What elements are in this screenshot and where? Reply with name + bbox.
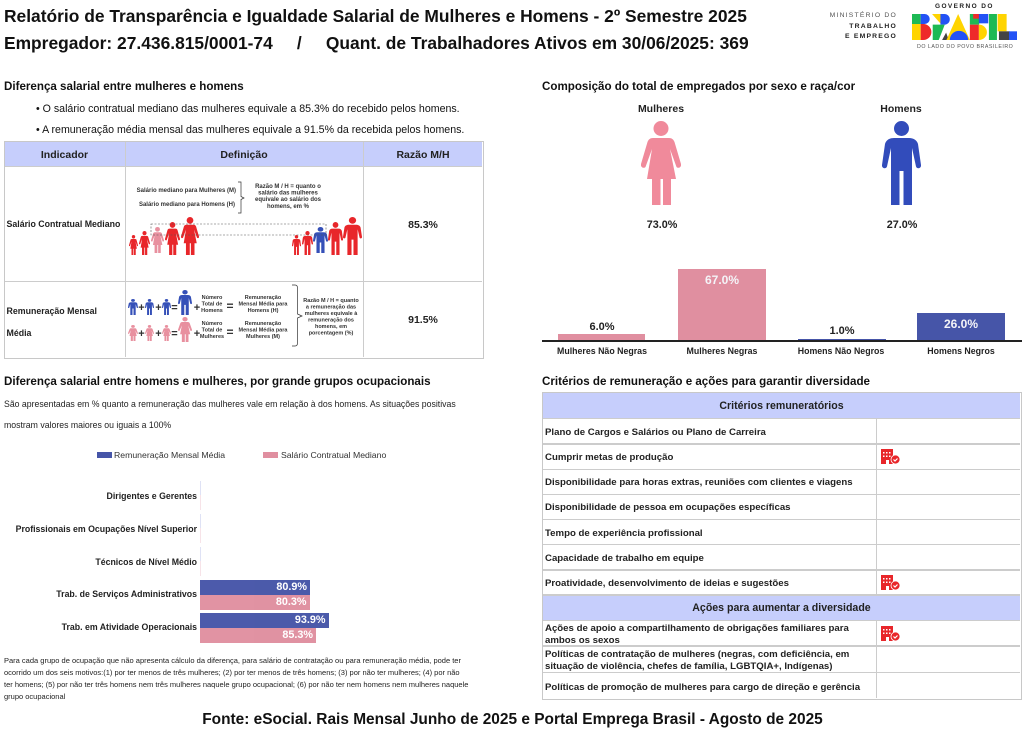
table header [5,142,482,166]
row label: remuneração: Média [6,328,31,338]
diagram: remuneração média: + [155,302,162,314]
bar chart: grupos ocupacionais: Técnicos de Nível Médio [95,557,197,567]
action row: situação de violência, chefes de família, LGBTQIA+, Indígenas) [545,661,832,672]
row label: salário contratual: Salário Contratual Mediano [6,219,120,229]
icon: woman [641,121,681,205]
diagram: remuneração média: Total de [202,328,222,334]
bar chart: composição [542,269,1022,356]
panel: criteria table [542,392,1022,700]
criteria row: Tempo de experiência profissional [545,528,703,538]
header: ações: Ações para aumentar a diversidade [692,602,871,614]
diagram: remuneração média: + [138,328,145,340]
value: 73%: 73.0% [647,219,677,231]
bar: administrativos remuneração: 80.9% [276,580,307,592]
footnote: Para cada grupo de ocupação que não apresenta cálculo da diferença, para salário de contratação ou para remuneração média, pode ter [4,656,461,665]
header: critérios remuneratórios [543,393,1020,418]
criteria row: Disponibilidade para horas extras, reuniões com clientes e viagens [545,476,853,488]
diagram: salário mediano: salário das mulheres [258,190,319,196]
logo: governo do Brasil [912,2,1017,50]
bar: operacionais salário [200,628,316,642]
employer line: Empregador: 27.436.815/0001-74 / Quant. de Trabalhadores Ativos em 30/06/2025: 369 [4,33,749,53]
diagram: salário mediano: Salário mediano para Mulheres (M) [137,188,236,194]
diagram: remuneração média: Total de [202,302,222,308]
diagram: remuneração média: + [194,328,200,340]
intro text: mostram valores maiores ou iguais a 100% [4,420,171,430]
bar chart: grupos ocupacionais: Trab. de Serviços Administrativos [56,589,197,599]
diagram: salário mediano: equivale ao salário dos [255,197,322,203]
bar chart: grupos ocupacionais: Trab. em Atividade Operacionais [62,622,197,632]
criteria row: Disponibilidade de pessoa em ocupações específicas [545,502,791,512]
diagram: remuneração média: Mensal Média para [239,328,288,334]
diagram: remuneração média: Mensal Média para [239,302,288,308]
bar: operacionais remuneração [200,612,328,628]
title: Relatório de Transparência e Igualdade Salarial de Mulheres e Homens - 2º Semestre 2025 [4,6,747,26]
icon: empresa check [881,449,900,464]
diagram: remuneração média [128,284,359,346]
diagram: remuneração média: homens, em [315,324,347,330]
bar chart: grupos ocupacionais: Profissionais em Ocupações Nível Superior [16,524,197,534]
value: 91.5: 91.5% [408,314,438,326]
criteria row: Plano de Cargos e Salários ou Plano de Carreira [545,426,766,438]
diagram: remuneração média: = [171,302,178,314]
diagram: remuneração média: porcentagem (%) [309,330,353,336]
bar chart: grupos ocupacionais [16,481,329,643]
diagram: remuneração média: Mulheres [200,334,224,340]
diagram: remuneração média: Homens [201,308,223,314]
action row: Políticas de promoção de mulheres para cargo de direção e gerência [545,682,860,692]
bar: homens negros: 26.0% [944,317,978,331]
criteria row: Capacidade de trabalho em equipe [545,552,704,564]
bar: administrativos salário: 80.3% [276,596,306,608]
footnote: ter homens; (5) por não ter três homens nem três mulheres naquele grupo ocupacional; (6) por não ter nem homens nem mulheres naquele [4,680,468,689]
logo: governo do Brasil: GOVERNO DO [935,2,994,10]
value: 27%: 27.0% [887,219,917,231]
diagram: remuneração média: Homens (H) [248,308,279,314]
diagram: remuneração média: Número [202,295,223,301]
action row: Políticas de contratação de mulheres (negras, com deficiência, em [545,649,849,660]
logo: ministry: MINISTÉRIO DO [830,12,897,19]
diagram: remuneração média: = [226,299,234,313]
diagram: remuneração média: + [138,302,145,314]
diagram: salário mediano: homens, em % [267,204,310,210]
diagram: remuneração média: remuneração dos [308,318,354,324]
axis label: Mulheres Não Negras [557,346,647,356]
legend: Salário Contratual Mediano [281,450,386,460]
bar: homens negros [917,313,1005,341]
row label: remuneração [6,306,97,338]
bullet list: • O salário contratual mediano das mulheres equivale a 85.3% do recebido pelos homens. [36,102,460,114]
source: Fonte: eSocial. Rais Mensal Junho de 2025 e Portal Emprega Brasil - Agosto de 2025 [202,711,823,728]
action row: Ações de apoio a compartilhamento de obrigações familiares para [545,623,849,634]
bar: mulheres não negras [558,334,645,341]
diagram: remuneração média: + [155,328,162,340]
diagram: remuneração média: = [226,325,234,339]
icon: man [882,121,921,205]
value: 85.3: 85.3% [408,219,438,231]
row label: remuneração: Remuneração Mensal [6,306,97,316]
diagram: remuneração média: + [194,302,200,314]
axis label: Homens Não Negros [798,346,884,356]
column: indicador: Indicador [41,148,88,160]
icon: empresa check [881,575,900,590]
label: homens: Homens [880,103,922,115]
diagram: salário mediano: Salário mediano para Homens (H) [139,202,235,208]
diagram: salário mediano [129,182,362,255]
bar: operacionais salário: 85.3% [282,628,313,640]
bar: administrativos salário [200,594,310,610]
action row: ambos os sexos [545,635,620,646]
bar: mulheres negras: 67.0% [705,273,739,287]
legend: Remuneração Mensal Média [114,450,225,460]
bar: homens não negros [798,339,886,341]
logo: ministry: E EMPREGO [845,33,897,40]
intro text [4,399,456,430]
diagram: remuneração média: Número [202,321,223,327]
intro text: São apresentadas em % quanto a remuneração das mulheres vale em relação à dos homens. As situações positivas [4,399,456,409]
logo: ministry [830,11,897,40]
column: definição: Definição [220,148,268,160]
icon: empresa check [881,626,900,641]
heading: composição: Composição do total de empregados por sexo e raça/cor [542,80,855,93]
column: razão: Razão M/H [396,148,450,160]
bar: mulheres negras [678,269,766,341]
diagram: remuneração média: Remuneração [245,295,282,301]
bullet list: • A remuneração média mensal das mulheres equivale a 91.5% da recebida pelos homens. [36,124,464,136]
footnote: grupo ocupacional [4,692,65,701]
value: 1%: 1.0% [829,325,855,337]
heading: grupos ocupacionais: Diferença salarial entre homens e mulheres, por grande grupos ocupacionais [4,375,431,388]
header: ações [543,595,1020,620]
bar: administrativos remuneração [200,580,310,594]
diagram: salário mediano: Razão M / H = quanto o [255,184,321,190]
diagram: remuneração média: = [171,328,178,340]
heading: diferença salarial: Diferença salarial entre mulheres e homens [4,80,244,93]
diagram: remuneração média: Remuneração [245,321,282,327]
logo: ministry: TRABALHO [849,23,897,30]
criteria row: Proatividade, desenvolvimento de ideias e sugestões [545,578,789,588]
diagram: remuneração média: Mulheres (M) [246,334,280,340]
action row [545,649,849,672]
footnote: ocorrido um dos seis motivos:(1) por ter menos de três mulheres; (2) por ter menos de três homens; (3) por não ter mulheres; (4) por não [4,668,460,677]
logo: governo do Brasil: DO LADO DO POVO BRASILEIRO [917,44,1013,50]
diagram: remuneração média: a remuneração das [306,304,356,310]
criteria row: Cumprir metas de produção [545,452,673,462]
panel: indicator table [4,141,484,359]
axis label: Homens Negros [927,346,995,356]
heading: critérios: Critérios de remuneração e ações para garantir diversidade [542,375,870,388]
axis label: Mulheres Negras [687,346,757,356]
diagram: remuneração média: Razão M / H = quanto [303,298,359,304]
bar: operacionais remuneração: 93.9% [295,614,326,626]
legend [97,450,386,460]
bullet list [36,102,464,136]
header: critérios remuneratórios: Critérios remuneratórios [719,400,844,412]
diagram: remuneração média: mulheres equivale à [305,311,358,317]
value: 6%: 6.0% [589,321,615,333]
label: mulheres: Mulheres [638,103,684,115]
footnote [4,656,468,701]
action row [545,623,849,646]
bar chart: grupos ocupacionais: Dirigentes e Gerentes [107,491,197,501]
